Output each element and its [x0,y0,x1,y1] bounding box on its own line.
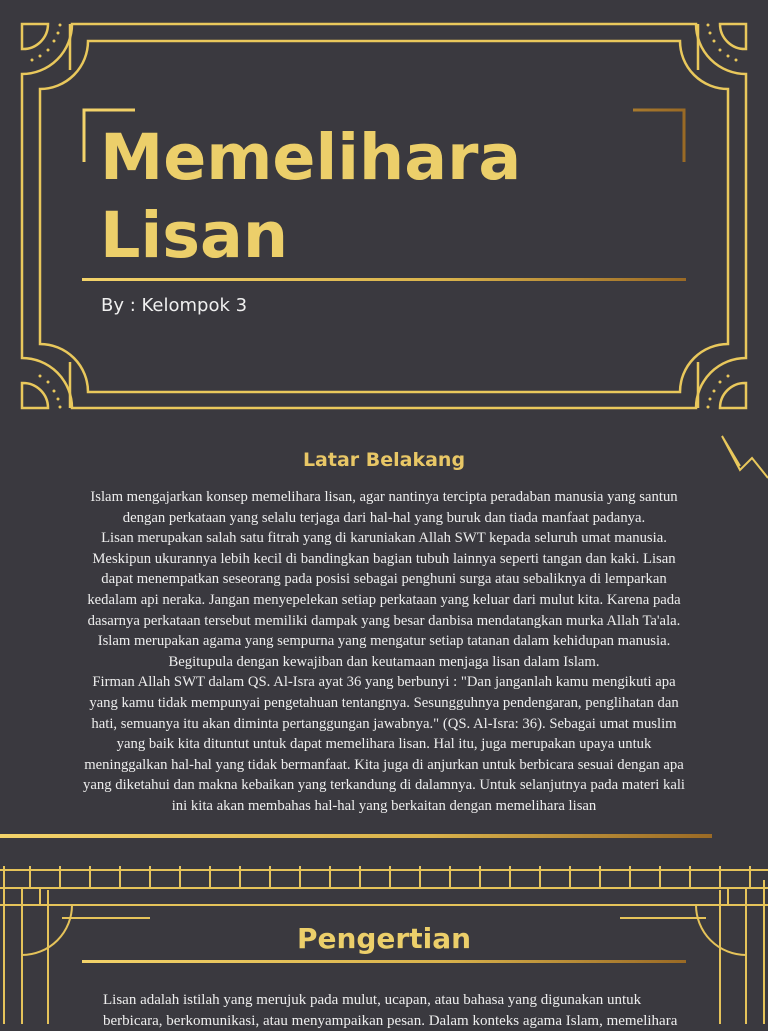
subtitle: By : Kelompok 3 [101,295,247,316]
text block: latar belakang: meninggalkan hal-hal yang tidak bermanfaat. Kita juga di anjurkan untuk berbicara sesuai dengan apa [84,757,684,773]
text block: latar belakang: Begitupula dengan kewajiban dan keutamaan menjaga lisan dalam Islam. [168,654,600,670]
text block: latar belakang: Firman Allah SWT dalam QS. Al-Isra ayat 36 yang berbunyi : "Dan janganlah kamu mengikuti apa [92,674,676,690]
heading: pengertian: Pengertian [297,922,471,955]
text block: latar belakang: hati, semuanya itu akan diminta pertanggungan jawabnya." (QS. Al-Isra: 36). Sebagai umat muslim [91,716,677,732]
text block: latar belakang [83,489,685,814]
text block: latar belakang: dengan perkataan yang selalu terjaga dari hal-hal yang buruk dan tiada manfaat padanya. [123,510,645,526]
text block: latar belakang: dapat menempatkan seseorang pada posisi sebagai penghuni surga atau sebaliknya di lemparkan [101,571,667,587]
text block: pengertian [103,992,678,1029]
text block: latar belakang: Islam mengajarkan konsep memelihara lisan, agar nantinya tercipta peradaban manusia yang santun [90,489,678,505]
text block: latar belakang: yang baik kita dituntut untuk dapat memelihara lisan. Hal itu, juga merupakan upaya untuk [117,736,651,752]
text block: latar belakang: Meskipun ukurannya lebih kecil di bandingkan bagian tubuh lainnya seperti tangan dan kaki. Lisan [92,551,676,567]
text block: latar belakang: dasarnya perkataan tersebut memiliki dampak yang besar danbisa mendatangkan murka Allah Ta'ala. [88,613,680,629]
text block: latar belakang: kedalam api neraka. Jangan menyepelekan setiap perkataan yang keluar dari mulut kita. Karena pada [87,592,681,608]
text block: pengertian: berbicara, berkomunikasi, atau menyampaikan pesan. Dalam konteks agama Islam, memelihara [103,1013,677,1029]
title: Lisan [100,198,288,272]
text block: latar belakang: ini kita akan membahas hal-hal yang berkaitan dengan memelihara lisan [172,798,596,814]
text block: latar belakang: yang kamu tidak mempunyai pengetahuan tentangnya. Sesungguhnya pendengaran, penglihatan dan [89,695,679,711]
text block: latar belakang: yang diketahui dan makna kebaikan yang terkandung di dalamnya. Untuk selanjutnya pada materi kali [83,777,685,793]
text block: latar belakang: Lisan merupakan salah satu fitrah yang di karuniakan Allah SWT kepada seluruh umat manusia. [101,530,667,546]
text block: pengertian: Lisan adalah istilah yang merujuk pada mulut, ucapan, atau bahasa yang digunakan untuk [103,992,641,1008]
title: Memelihara [100,120,521,194]
heading: latar belakang: Latar Belakang [303,449,465,471]
title [100,120,521,272]
text block: latar belakang: Islam merupakan agama yang sempurna yang mengatur setiap tatanan dalam kehidupan manusia. [98,633,670,649]
